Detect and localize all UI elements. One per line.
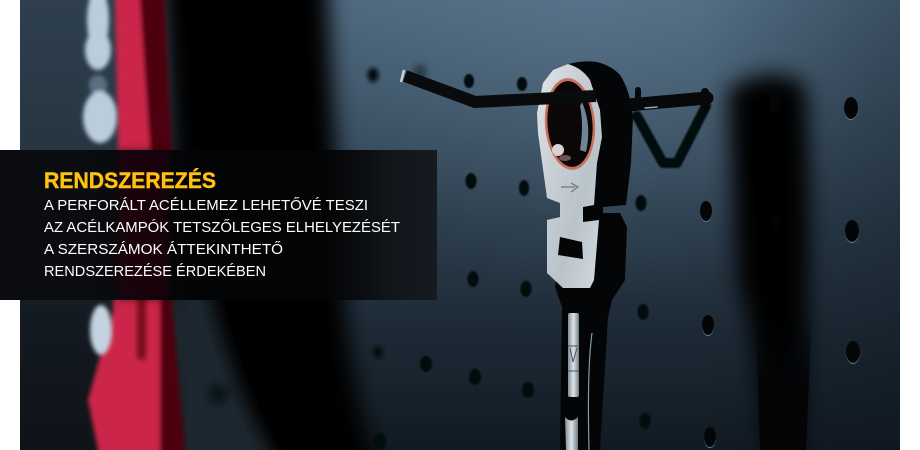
hook front wire: [401, 70, 596, 102]
panel: caption: [0, 150, 437, 300]
handle hole: [565, 398, 577, 418]
wrench: [537, 61, 633, 450]
blurred foreground left wall: [20, 0, 119, 450]
blurred dark panel at bottom: [175, 300, 270, 450]
ring: [544, 78, 596, 170]
body text: RENDSZEREZÉSE ÉRDEKÉBEN: [44, 263, 266, 280]
body text: AZ ACÉLKAMPÓK TETSZŐLEGES ELHELYEZÉSÉT: [44, 219, 400, 236]
ring inner reflection: [580, 102, 588, 152]
blurred silver sockets: [83, 0, 117, 355]
wall holes: [209, 66, 650, 449]
heading: RENDSZEREZÉS: [44, 168, 216, 193]
blurred black foreground band: [162, 0, 372, 450]
wrench silver head: [537, 64, 602, 288]
handle silver strip: [568, 313, 579, 397]
right wall holes: [700, 93, 860, 448]
handle engraving: [568, 346, 579, 371]
handle edge reflection: [588, 333, 592, 450]
blurred red tool: [88, 0, 185, 450]
arrow mark: [561, 183, 578, 192]
wrench dark side: [555, 61, 633, 450]
handle lower strip: [565, 417, 578, 450]
body text: A PERFORÁLT ACÉLLEMEZ LEHETŐVÉ TESZI: [44, 197, 368, 214]
hook rear wires: [628, 90, 707, 163]
red tool notch: [137, 296, 146, 360]
panel red tint: [118, 150, 168, 300]
body text: A SZERSZÁMOK ÁTTEKINTHETŐ: [44, 241, 283, 258]
wall shadow of the hook and wrench: [728, 75, 812, 450]
body text: [44, 197, 400, 280]
hole rims: [700, 98, 860, 448]
fork slot: [558, 237, 583, 259]
